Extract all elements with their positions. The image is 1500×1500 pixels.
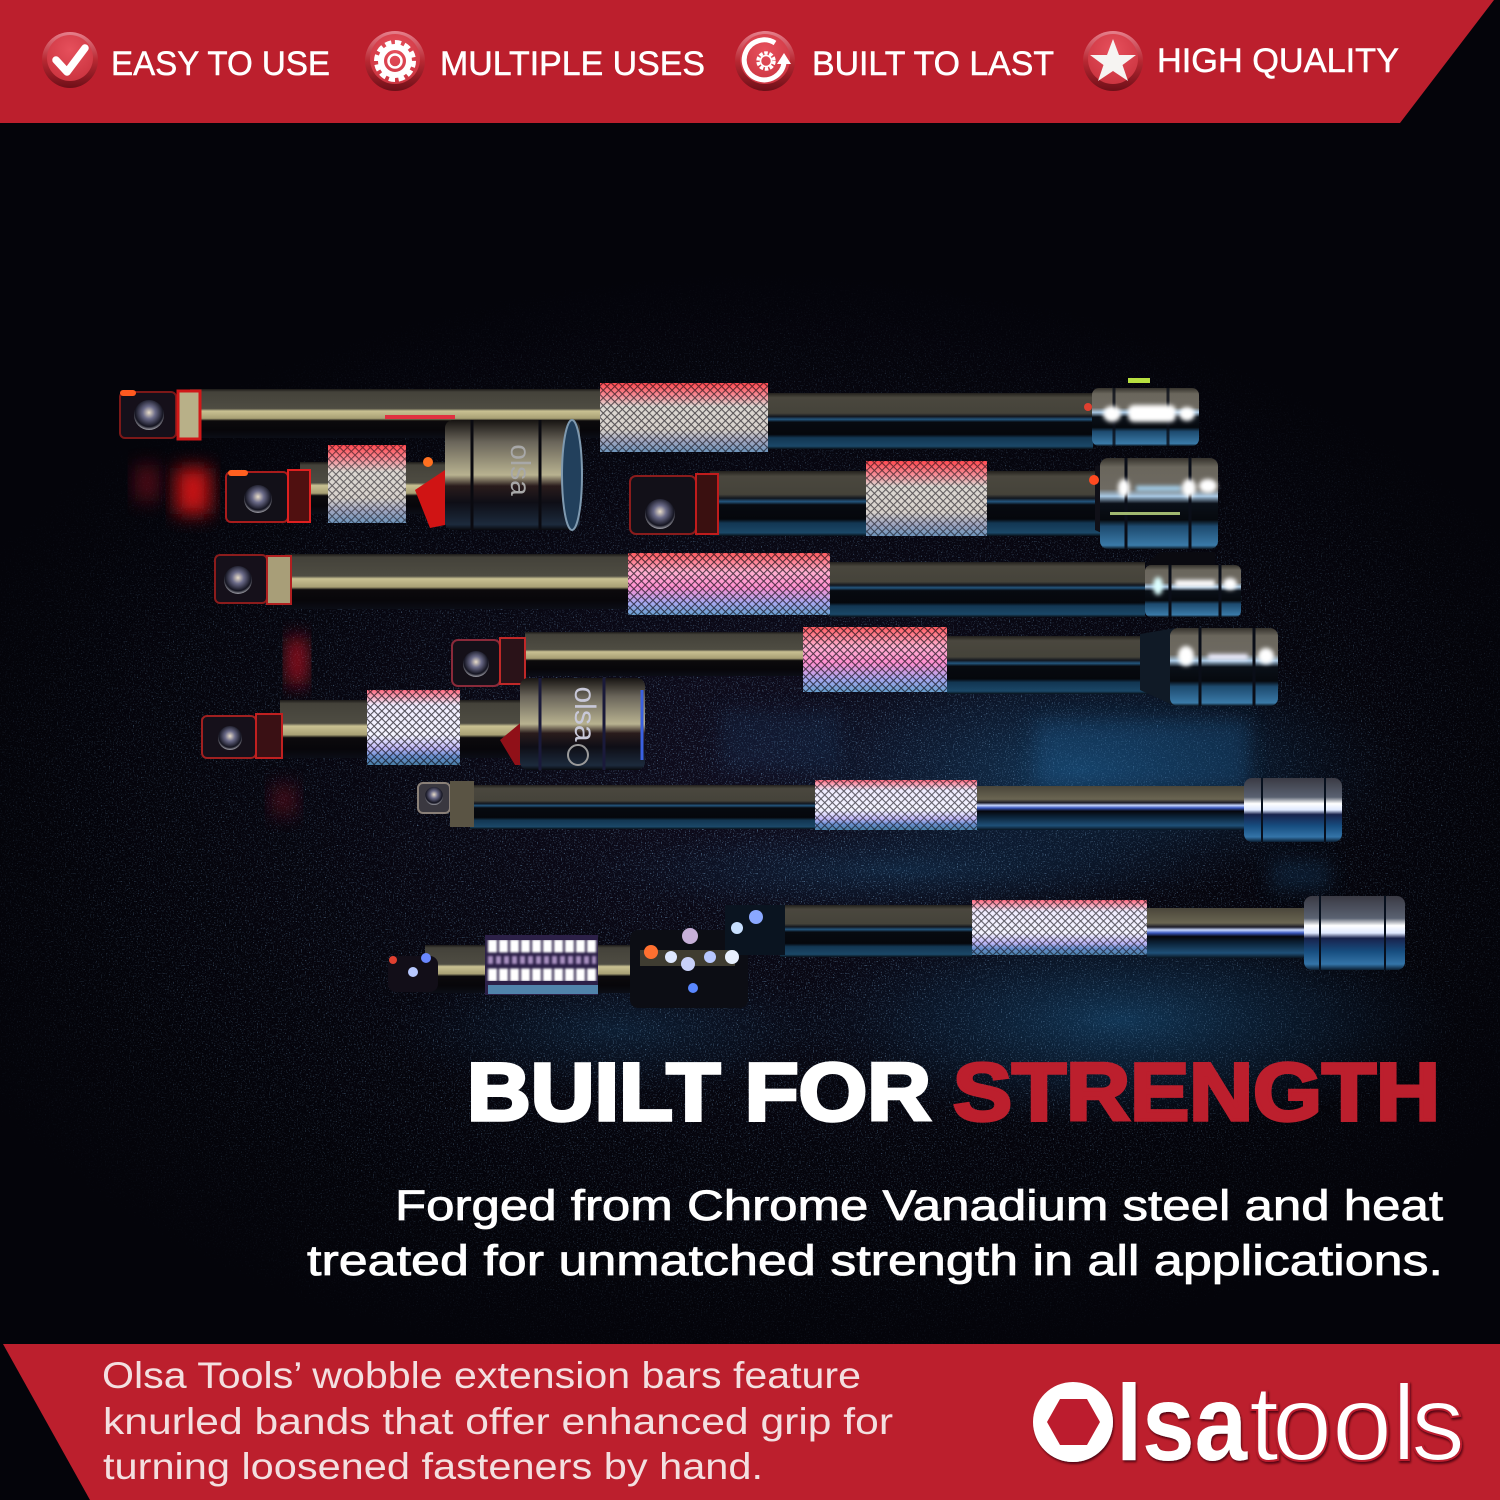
knurled band (866, 461, 987, 536)
icon: gear (365, 31, 425, 91)
socket: olsa (505, 444, 536, 496)
text block: knurled bands note: Olsa Tools’ wobble extension bars feature (102, 1355, 861, 1396)
socket (1304, 896, 1405, 970)
tool 7: thin extension bar (418, 778, 1342, 842)
top banner (0, 0, 1494, 123)
label: high quality: HIGH QUALITY (1157, 42, 1399, 80)
knurled band (803, 627, 947, 692)
tool 6: short extension with large socket, left (202, 678, 645, 770)
icon: cycle gear (735, 31, 795, 91)
text block: knurled bands note (102, 1355, 893, 1487)
text block: description: treated for unmatched strength in all applications. (307, 1237, 1443, 1285)
logo: Olsatools: tools (1249, 1362, 1465, 1483)
socket (1145, 552, 1241, 617)
text block: description: Forged from Chrome Vanadium steel and heat (395, 1182, 1443, 1230)
bottom banner (3, 1344, 1500, 1500)
socket (520, 678, 645, 770)
tool 2: short extension with large socket (226, 420, 582, 530)
icon: star (1083, 31, 1143, 91)
tool 4: long extension bar, middle (215, 552, 1241, 617)
heading: built for strength: BUILT FOR (467, 1047, 931, 1138)
socket (1244, 778, 1342, 842)
tool 8: joined extension bars, bottom (388, 896, 1405, 1008)
socket: olsa (568, 686, 601, 742)
knurled band: lower bar (485, 935, 598, 995)
logo: Olsatools: lsa (1116, 1362, 1248, 1483)
knurled band (600, 383, 768, 452)
heading: built for strength (467, 1047, 1440, 1138)
heading: built for strength: STRENGTH (953, 1047, 1440, 1138)
label: easy to use: EASY TO USE (111, 45, 330, 83)
tool 5: long extension bar, lower middle (452, 627, 1278, 706)
knurled band (815, 780, 977, 830)
icon: check (42, 32, 98, 88)
label: built to last: BUILT TO LAST (812, 45, 1054, 83)
joint socket with reflections (630, 905, 785, 1008)
knurled band (367, 690, 460, 765)
logo: Olsatools: O (1031, 1362, 1115, 1483)
socket (1084, 378, 1199, 446)
knurled band (628, 553, 830, 615)
text block: knurled bands note: turning loosened fasteners by hand. (103, 1446, 763, 1487)
socket (445, 420, 582, 530)
text block: knurled bands note: knurled bands that offer enhanced grip for (103, 1401, 893, 1442)
logo: Olsatools (1031, 1362, 1465, 1483)
socket (1170, 628, 1278, 706)
knurled band (328, 445, 406, 523)
label: multiple uses: MULTIPLE USES (440, 45, 705, 83)
knurled band: upper bar (972, 900, 1147, 955)
tool 1: long extension bar, top (120, 378, 1199, 452)
tool 3: medium extension with large socket (630, 458, 1218, 549)
socket (1089, 458, 1218, 549)
text block: description (307, 1182, 1443, 1285)
